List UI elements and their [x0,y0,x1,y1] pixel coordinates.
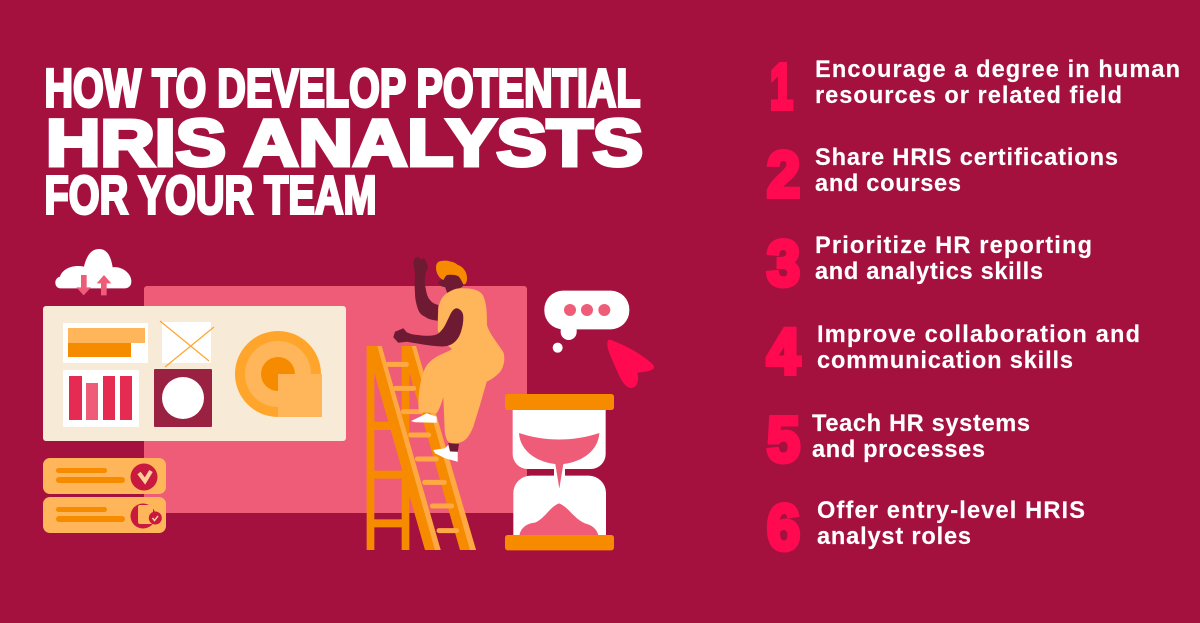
step 2 text: Share HRIS certifications [815,145,1118,171]
circle widget [154,369,212,427]
number 2: 2 [767,138,800,210]
number 4: 4 [767,316,800,388]
card: scheduled item [43,497,166,533]
number 1: 1 [770,50,793,122]
step 6 [767,492,1085,564]
card: approved item [43,458,166,494]
title: HOW TO DEVELOP POTENTIAL [44,58,640,118]
step 6 text [817,498,1085,550]
number 5: 5 [767,404,800,476]
step 2 text [815,145,1118,197]
step 2 [767,138,1118,210]
image placeholder widget [160,321,214,367]
step 4 text: Improve collaboration and [817,322,1140,348]
step 1 [770,50,1180,122]
icon: cursor [607,340,654,388]
speech bubble [544,291,629,353]
icon: cloud with arrows [55,249,131,295]
number 6: 6 [767,492,800,564]
step 6 text: analyst roles [817,524,971,550]
step 2 text: and courses [815,171,961,197]
step 5 text: and processes [812,437,985,463]
title [44,58,643,226]
panel: pink backdrop [144,286,527,513]
number 3: 3 [767,228,800,300]
person climbing [393,257,504,462]
step 5 text [812,411,1030,463]
step 1 text: resources or related field [815,83,1122,109]
step 3 text [815,233,1092,285]
horizontal bar widget [63,323,148,363]
step 4 text [817,322,1140,374]
hourglass [505,394,614,550]
title: HRIS ANALYSTS [46,106,643,180]
title: FOR YOUR TEAM [44,166,376,226]
step 3 text: and analytics skills [815,259,1043,285]
panel: dashboard [43,306,346,441]
step 3 text: Prioritize HR reporting [815,233,1092,259]
step 1 text: Encourage a degree in human [815,57,1180,83]
step 5 text: Teach HR systems [812,411,1030,437]
donut chart [235,331,322,417]
step 4 [767,316,1140,388]
step 3 [767,228,1092,300]
column chart widget [63,370,139,427]
step 4 text: communication skills [817,348,1073,374]
step 1 text [815,57,1180,109]
ladder [367,346,476,550]
step 5 [767,404,1030,476]
step 6 text: Offer entry-level HRIS [817,498,1085,524]
